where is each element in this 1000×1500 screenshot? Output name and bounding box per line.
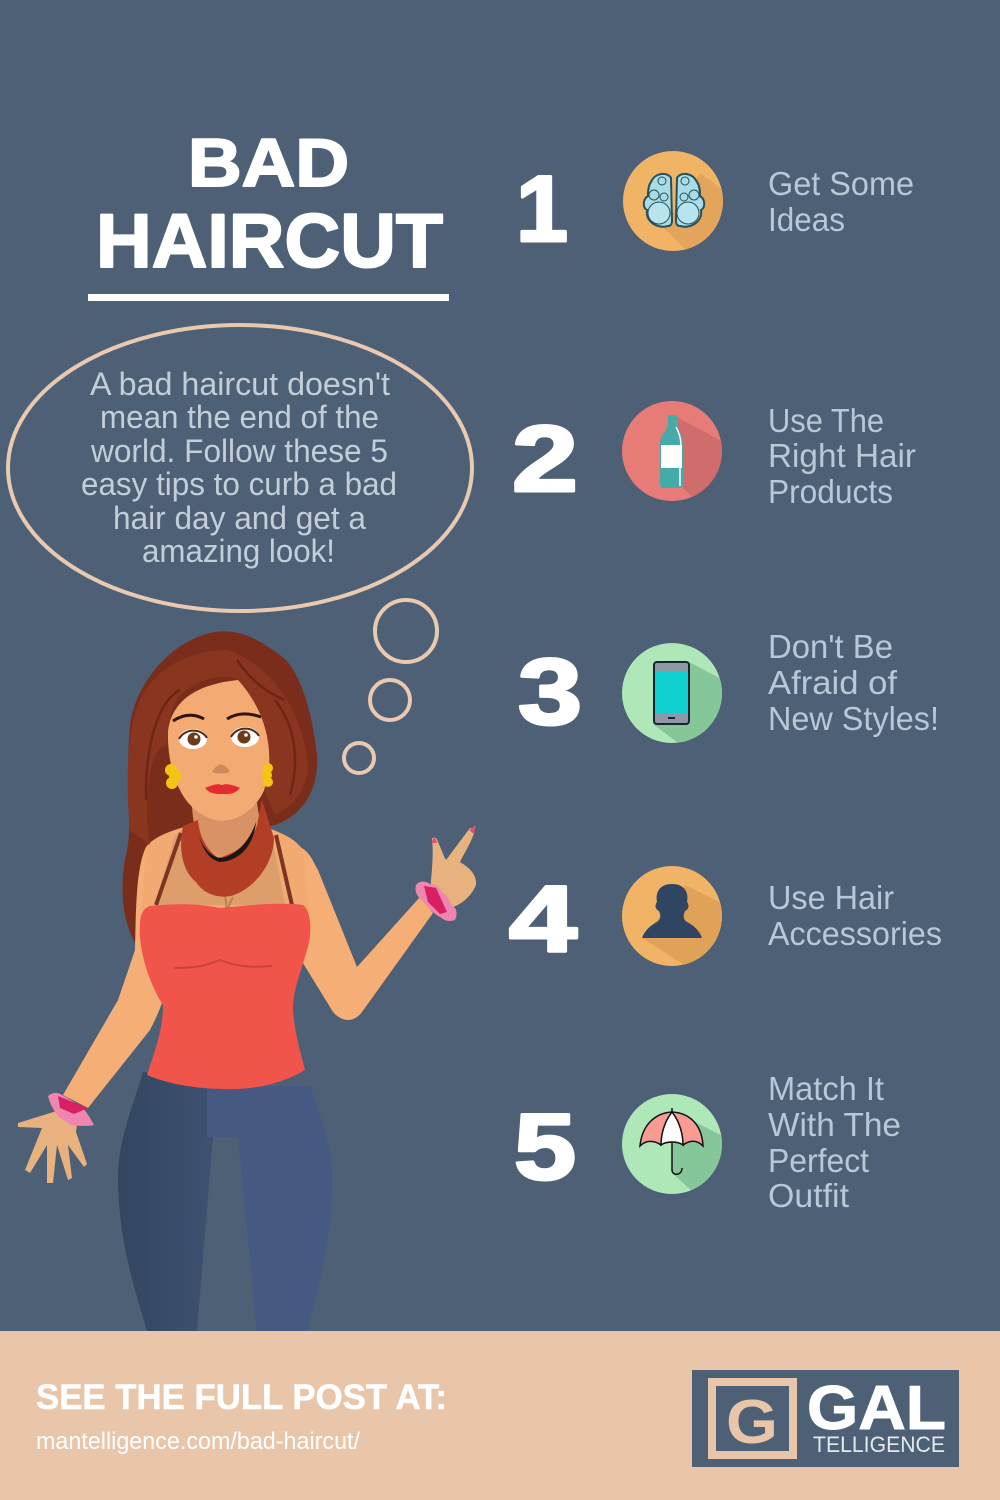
straps [156,833,292,905]
eyes [179,727,259,749]
tip 3 text: Don't Be [768,628,893,665]
step 4 [508,866,941,966]
right scrunchie inner [424,886,447,914]
right arm [295,845,433,1020]
thought bubble with intro text [8,325,472,773]
scarf shadow [199,822,256,862]
tip 1 text: Ideas [768,201,845,238]
lips [205,784,240,794]
tip 2 text: Use The [768,402,884,439]
eyebrows [173,714,261,721]
nails [432,825,476,843]
left scrunchie inner [58,1096,88,1114]
tip 5 text: Perfect [768,1142,869,1179]
intro text: hair day and get a [113,500,366,536]
tip 4 text [768,879,942,952]
tip 4 text: Use Hair [768,879,894,916]
intro text: mean the end of the [100,399,379,435]
necklace [225,895,233,925]
title underline [88,294,449,301]
scarf [181,800,274,897]
back hair [122,631,317,943]
thought circles [344,600,437,773]
hair streaks [146,660,295,800]
icon: person silhouette [622,866,722,966]
tip 2 text [768,402,916,510]
left hand [18,1110,87,1183]
icon: umbrella [622,1094,722,1194]
footer heading: SEE THE FULL POST AT: [36,1378,447,1417]
intro text: world. Follow these 5 [90,433,388,469]
left scrunchie [48,1093,94,1126]
intro text: amazing look! [142,533,335,569]
left arm [63,847,170,1108]
logo: TELLIGENCE [813,1432,945,1457]
icon: brain [623,151,723,251]
right hand [430,828,476,908]
face [168,680,272,821]
intro text: easy tips to curb a bad [81,466,397,502]
right scrunchie [415,882,457,921]
tip 1 text: Get Some [768,165,914,202]
tip 1 text [768,165,914,238]
step 3 [518,635,936,743]
intro text [81,366,397,569]
footer [0,1331,1000,1500]
woman illustration [18,631,476,1331]
title [96,125,443,284]
tip 2 text: Products [768,473,893,510]
number 3: 3 [518,639,582,744]
chest [140,825,310,925]
icon: phone [622,643,722,743]
icon: bottle [622,401,722,501]
number 2: 2 [512,406,578,511]
logo: GAL [807,1374,946,1443]
title: BAD [188,125,349,201]
step 2 [514,401,916,504]
tip 5 text [768,1070,901,1214]
pants [118,1072,332,1331]
logo: G [726,1388,778,1457]
tip 3 text: Afraid of [768,664,898,701]
number 1: 1 [516,156,568,261]
tip 2 text: Right Hair [768,437,916,474]
tip 3 text: New Styles! [768,700,939,737]
earrings [165,763,273,789]
tip 3 text [768,628,939,737]
nose [212,764,230,774]
step 5 [516,1076,900,1208]
number 4: 4 [509,866,577,971]
step 1 [520,151,913,251]
number 5: 5 [514,1094,576,1199]
tip 5 text: With The [768,1106,901,1143]
tip 4 text: Accessories [768,915,942,952]
chest shade [155,825,285,905]
neck [190,790,262,856]
logo [692,1370,959,1467]
top crease [174,960,272,968]
footer url: mantelligence.com/bad-haircut/ [36,1428,360,1455]
title: HAIRCUT [96,199,443,284]
tip 5 text: Match It [768,1070,884,1107]
intro text: A bad haircut doesn't [90,366,390,402]
red top [140,904,310,1089]
tip 5 text: Outfit [768,1177,849,1214]
front hair [128,650,308,845]
